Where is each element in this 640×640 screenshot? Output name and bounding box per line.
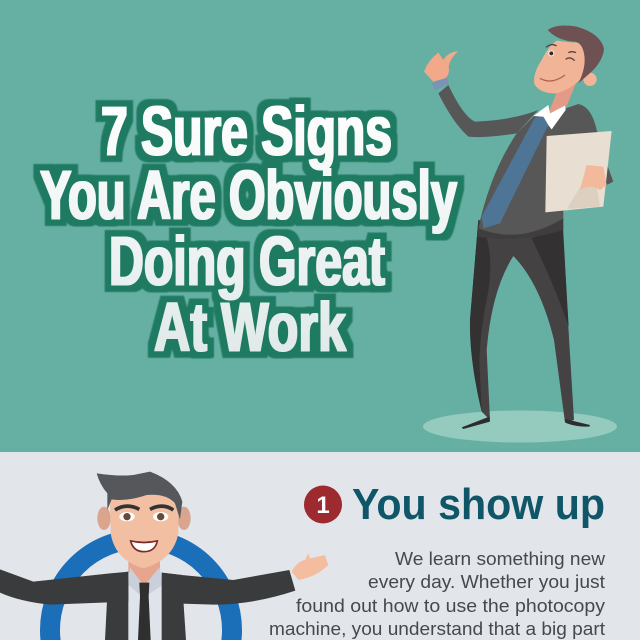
icon: blue ring bbox=[50, 539, 232, 640]
title: At Work bbox=[154, 288, 346, 366]
icon: floor shadow bbox=[423, 410, 617, 442]
neck bbox=[128, 557, 160, 586]
jacket and arms bbox=[0, 569, 295, 640]
mouth bbox=[131, 541, 157, 552]
body text: We learn something new bbox=[395, 548, 606, 569]
title: Doing Great bbox=[109, 222, 385, 300]
eyes bbox=[119, 512, 168, 521]
body text: machine, you understand that a big part bbox=[269, 618, 605, 639]
ears bbox=[97, 507, 191, 530]
eyebrows bbox=[115, 506, 173, 510]
collar bbox=[128, 567, 163, 593]
illustration: man with open arms bbox=[0, 472, 328, 640]
header panel bbox=[0, 0, 640, 452]
upper body bbox=[424, 26, 613, 239]
body text: every day. Whether you just bbox=[368, 571, 605, 592]
title: 7 Sure Signs bbox=[101, 92, 392, 170]
face bbox=[110, 482, 178, 568]
trousers bbox=[462, 220, 590, 429]
right hand bbox=[292, 553, 328, 580]
lower panel bbox=[0, 452, 640, 640]
illustration: man with thumb up and paper bbox=[424, 26, 613, 429]
body text bbox=[269, 548, 606, 639]
title bbox=[40, 92, 457, 366]
hair bbox=[97, 472, 182, 519]
body text: found out how to use the photocopy bbox=[296, 595, 606, 616]
title: You Are Obviously bbox=[40, 156, 457, 234]
number badge: 1 bbox=[316, 492, 330, 519]
tie bbox=[138, 583, 151, 640]
shirt bbox=[128, 567, 162, 640]
heading: You show up bbox=[352, 480, 605, 529]
number badge bbox=[304, 486, 342, 524]
